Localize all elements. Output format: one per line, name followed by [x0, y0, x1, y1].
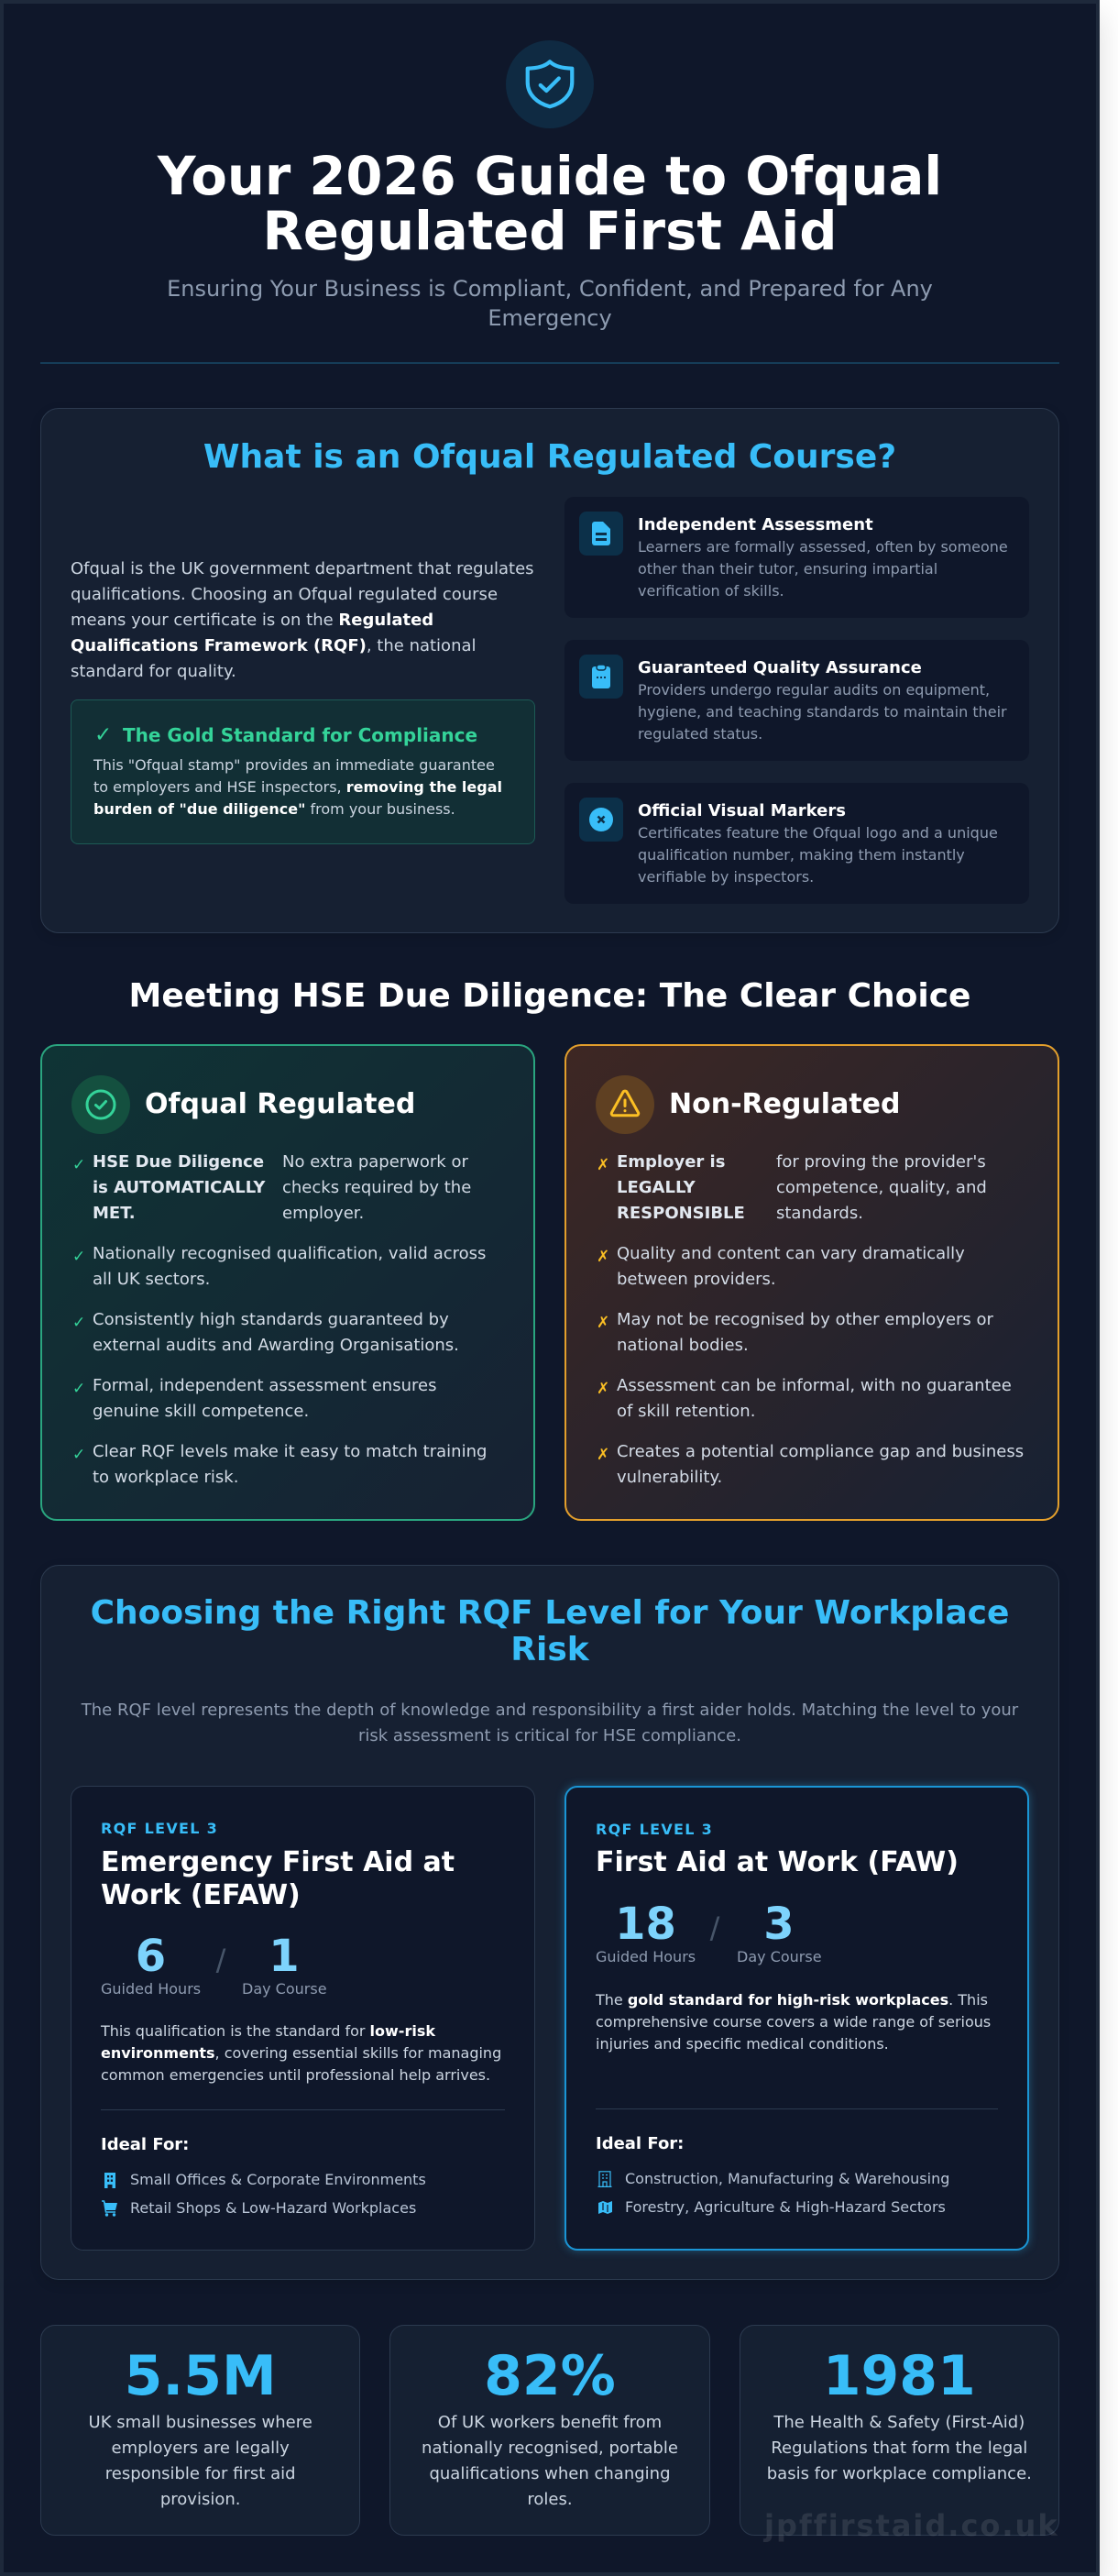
card text: verification of skills.	[638, 582, 784, 600]
stat: day course: 3	[763, 1899, 795, 1950]
subtitle	[167, 276, 933, 331]
stat text	[422, 2413, 678, 2509]
icon: outlined building	[597, 2171, 612, 2187]
stat: guided hours: 6	[136, 1931, 166, 1982]
course description: common emergencies until professional help arrives.	[101, 2066, 490, 2084]
list item 2: between providers.	[617, 1270, 776, 1289]
course title: Emergency First Aid at	[101, 1846, 455, 1878]
course description	[596, 1991, 991, 2052]
intro paragraph: means your certificate is on the Regulated	[71, 611, 433, 630]
card title: Independent Assessment	[638, 515, 873, 534]
stat text	[89, 2413, 312, 2509]
list item 4	[597, 1376, 1012, 1421]
list item 1: employer.	[282, 1204, 364, 1223]
list item 5	[72, 1442, 487, 1487]
callout text: burden of "due diligence" from your business.	[93, 800, 455, 818]
stat: day course	[737, 1899, 822, 1965]
stat text: roles.	[527, 2490, 573, 2509]
list item 5: Creates a potential compliance gap and business	[617, 1442, 1024, 1461]
stat number: 82%	[484, 2344, 616, 2408]
stat text	[767, 2413, 1032, 2483]
list item 2: all UK sectors.	[93, 1270, 210, 1289]
list item 5: ✗	[597, 1446, 609, 1464]
stat card: 5.5M	[40, 2325, 360, 2536]
card title: Official Visual Markers	[638, 801, 846, 820]
ideal for heading: Ideal For:	[101, 2135, 189, 2154]
stat: day course: 1	[269, 1931, 300, 1982]
card text: Certificates feature the Ofqual logo and a unique	[638, 824, 998, 842]
icon: shopping cart	[102, 2200, 117, 2217]
list item 4: ✗	[597, 1380, 609, 1398]
stat number: 1981	[823, 2344, 976, 2408]
stat: day course	[242, 1931, 327, 1998]
list item 1: Employer is	[617, 1152, 725, 1172]
list item 1: checks required by the	[282, 1178, 471, 1197]
card text: Learners are formally assessed, often by someone	[638, 538, 1008, 556]
list item 5: ✓	[72, 1446, 85, 1464]
list item 1: RESPONSIBLE	[617, 1204, 745, 1223]
stat text: basis for workplace compliance.	[767, 2464, 1032, 2483]
ideal item: forestry: Forestry, Agriculture & High-Hazard Sectors	[625, 2198, 946, 2216]
callout text: to employers and HSE inspectors, removing the legal	[93, 778, 502, 796]
stat: day course: Day Course	[242, 1980, 327, 1998]
list item 1: MET.	[93, 1204, 136, 1223]
list item 1: is AUTOMATICALLY	[93, 1178, 265, 1197]
section intro: risk assessment is critical for HSE compliance.	[358, 1726, 741, 1745]
course description: environments, covering essential skills for managing	[101, 2044, 501, 2062]
stat: guided hours: 18	[615, 1899, 676, 1950]
intro paragraph: qualifications. Choosing an Ofqual regulated course	[71, 585, 498, 604]
list item 3: May not be recognised by other employers or	[617, 1310, 993, 1329]
list item 1: competence, quality, and	[776, 1178, 987, 1197]
intro paragraph: standard for quality.	[71, 662, 236, 681]
list item 3: national bodies.	[617, 1336, 749, 1355]
list item 2: ✗	[597, 1248, 609, 1266]
subtitle: Emergency	[488, 305, 612, 331]
card title: Guaranteed Quality Assurance	[638, 658, 922, 677]
slash: /	[710, 1910, 719, 1945]
stat text: nationally recognised, portable	[422, 2438, 678, 2458]
stat: guided hours	[596, 1899, 696, 1965]
ideal item: construction: Construction, Manufacturing & Warehousing	[625, 2170, 949, 2187]
course title: First Aid at Work (FAW)	[596, 1846, 959, 1878]
list item 5: vulnerability.	[617, 1468, 722, 1487]
stat: guided hours: Guided Hours	[596, 1948, 696, 1965]
stat: guided hours: Guided Hours	[101, 1980, 201, 1998]
list item 1	[72, 1152, 471, 1223]
subtitle: Ensuring Your Business is Compliant, Confident, and Prepared for Any	[167, 276, 933, 302]
section intro	[81, 1701, 1019, 1745]
section heading: Choosing the Right RQF Level for Your Workplace	[91, 1594, 1009, 1632]
list item 1: standards.	[776, 1204, 863, 1223]
course description: This qualification is the standard for low-risk	[101, 2022, 435, 2040]
list item 1	[597, 1152, 987, 1223]
panel title: Ofqual Regulated	[145, 1088, 415, 1120]
stat text: Regulations that form the legal	[771, 2438, 1027, 2458]
panel: non-regulated	[564, 1044, 1059, 1521]
icon: folded map	[598, 2201, 612, 2214]
list item 3: ✓	[72, 1314, 85, 1332]
section heading: Risk	[510, 1631, 589, 1668]
list item 4: Formal, independent assessment ensures	[93, 1376, 436, 1395]
ideal item: retail: Retail Shops & Low-Hazard Workplaces	[130, 2199, 416, 2217]
intro paragraph: Ofqual is the UK government department that regulates	[71, 559, 534, 578]
card text	[638, 538, 1008, 600]
stat text: Of UK workers benefit from	[438, 2413, 662, 2432]
list item 1: ✗	[597, 1156, 609, 1174]
section heading: What is an Ofqual Regulated Course?	[203, 438, 896, 476]
callout: gold standard	[71, 699, 535, 844]
level label: RQF LEVEL 3	[596, 1821, 713, 1838]
list item 4: genuine skill competence.	[93, 1402, 309, 1421]
callout text: This "Ofqual stamp" provides an immediate guarantee	[93, 756, 495, 774]
list item 3: external audits and Awarding Organisations.	[93, 1336, 459, 1355]
stat text: responsible for first aid	[105, 2464, 296, 2483]
card: independent assessment	[564, 497, 1029, 618]
stat number: 5.5M	[125, 2344, 277, 2408]
stat text: provision.	[160, 2490, 240, 2509]
panel title: Non-Regulated	[669, 1088, 900, 1120]
list item 4: Assessment can be informal, with no guarantee	[617, 1376, 1012, 1395]
course card: FAW	[564, 1786, 1029, 2251]
card text: regulated status.	[638, 725, 762, 743]
ideal for heading: Ideal For:	[596, 2134, 684, 2153]
list item 2: ✓	[72, 1248, 85, 1266]
header icon: shield with check	[506, 40, 594, 128]
title	[157, 146, 942, 262]
list item 5	[597, 1442, 1024, 1487]
course card: EFAW	[71, 1786, 535, 2251]
list item 2: Nationally recognised qualification, valid across	[93, 1244, 486, 1263]
icon: circle with x	[579, 798, 623, 842]
stat text: UK small businesses where	[89, 2413, 312, 2432]
card text: Providers undergo regular audits on equipment,	[638, 681, 990, 699]
stat text: The Health & Safety (First-Aid)	[773, 2413, 1025, 2432]
stat: guided hours	[101, 1931, 201, 1998]
list item 4	[72, 1376, 436, 1421]
card text	[638, 824, 998, 886]
card text	[638, 681, 1007, 743]
intro paragraph	[71, 559, 534, 681]
stat card: 1981	[740, 2325, 1059, 2536]
list item 2	[597, 1244, 965, 1289]
list item 5: Clear RQF levels make it easy to match training	[93, 1442, 487, 1461]
title: Regulated First Aid	[262, 201, 838, 262]
course title: Work (EFAW)	[101, 1879, 301, 1911]
slash: /	[216, 1943, 225, 1977]
course description: The gold standard for high-risk workplaces. This	[596, 1991, 988, 2008]
list item 4: ✓	[72, 1380, 85, 1398]
list item 2: Quality and content can vary dramatically	[617, 1244, 965, 1263]
stat: day course: Day Course	[737, 1948, 822, 1965]
list item 1: No extra paperwork or	[282, 1152, 468, 1172]
icon: document	[579, 512, 623, 556]
list item 3: ✗	[597, 1314, 609, 1332]
callout heading: The Gold Standard for Compliance	[123, 724, 477, 746]
list item 5: to workplace risk.	[93, 1468, 238, 1487]
section intro: The RQF level represents the depth of knowledge and responsibility a first aider holds. Matching the level to your	[82, 1701, 1018, 1720]
list item 2	[72, 1244, 486, 1289]
card text: verifiable by inspectors.	[638, 868, 814, 886]
list item 1: ✓	[72, 1156, 85, 1174]
stat card: 82%	[389, 2325, 710, 2536]
list item 3	[597, 1310, 993, 1355]
list item 4: of skill retention.	[617, 1402, 755, 1421]
stat text: qualifications when changing	[429, 2464, 671, 2483]
ideal item: offices: Small Offices & Corporate Environments	[130, 2171, 426, 2188]
panel: Ofqual regulated	[40, 1044, 535, 1521]
list item 1: LEGALLY	[617, 1178, 696, 1197]
panel: what is an Ofqual regulated course	[40, 408, 1059, 933]
list item 1: for proving the provider's	[776, 1152, 986, 1172]
card: official visual markers	[564, 783, 1029, 904]
icon: check circle	[71, 1075, 130, 1134]
comparison heading: Meeting HSE Due Diligence: The Clear Choice	[129, 977, 970, 1015]
callout heading: ✓	[94, 723, 112, 747]
course title	[101, 1846, 455, 1911]
title: Your 2026 Guide to Ofqual	[158, 146, 942, 207]
course description	[101, 2022, 501, 2084]
callout text	[93, 756, 502, 818]
card text: qualification number, making them instantly	[638, 846, 965, 864]
level label: RQF LEVEL 3	[101, 1820, 218, 1837]
card: guaranteed quality assurance	[564, 640, 1029, 761]
icon: warning triangle	[596, 1075, 654, 1134]
section heading	[91, 1594, 1009, 1668]
card text: other than their tutor, ensuring impartial	[638, 560, 937, 578]
icon: clipboard	[579, 655, 623, 699]
list item 3	[72, 1310, 459, 1355]
course description: comprehensive course covers a wide range of serious	[596, 2013, 991, 2030]
watermark: jpffirstaid.co.uk	[764, 2508, 1059, 2543]
intro paragraph: Qualifications Framework (RQF), the national	[71, 636, 477, 655]
list item 1: HSE Due Diligence	[93, 1152, 264, 1172]
icon: building	[104, 2173, 115, 2188]
course description: injuries and specific medical conditions.	[596, 2035, 889, 2052]
list item 3: Consistently high standards guaranteed by	[93, 1310, 449, 1329]
stat text: employers are legally	[112, 2438, 290, 2458]
panel: choosing the right RQF level	[40, 1565, 1059, 2280]
card text: hygiene, and teaching standards to maintain their	[638, 703, 1007, 721]
